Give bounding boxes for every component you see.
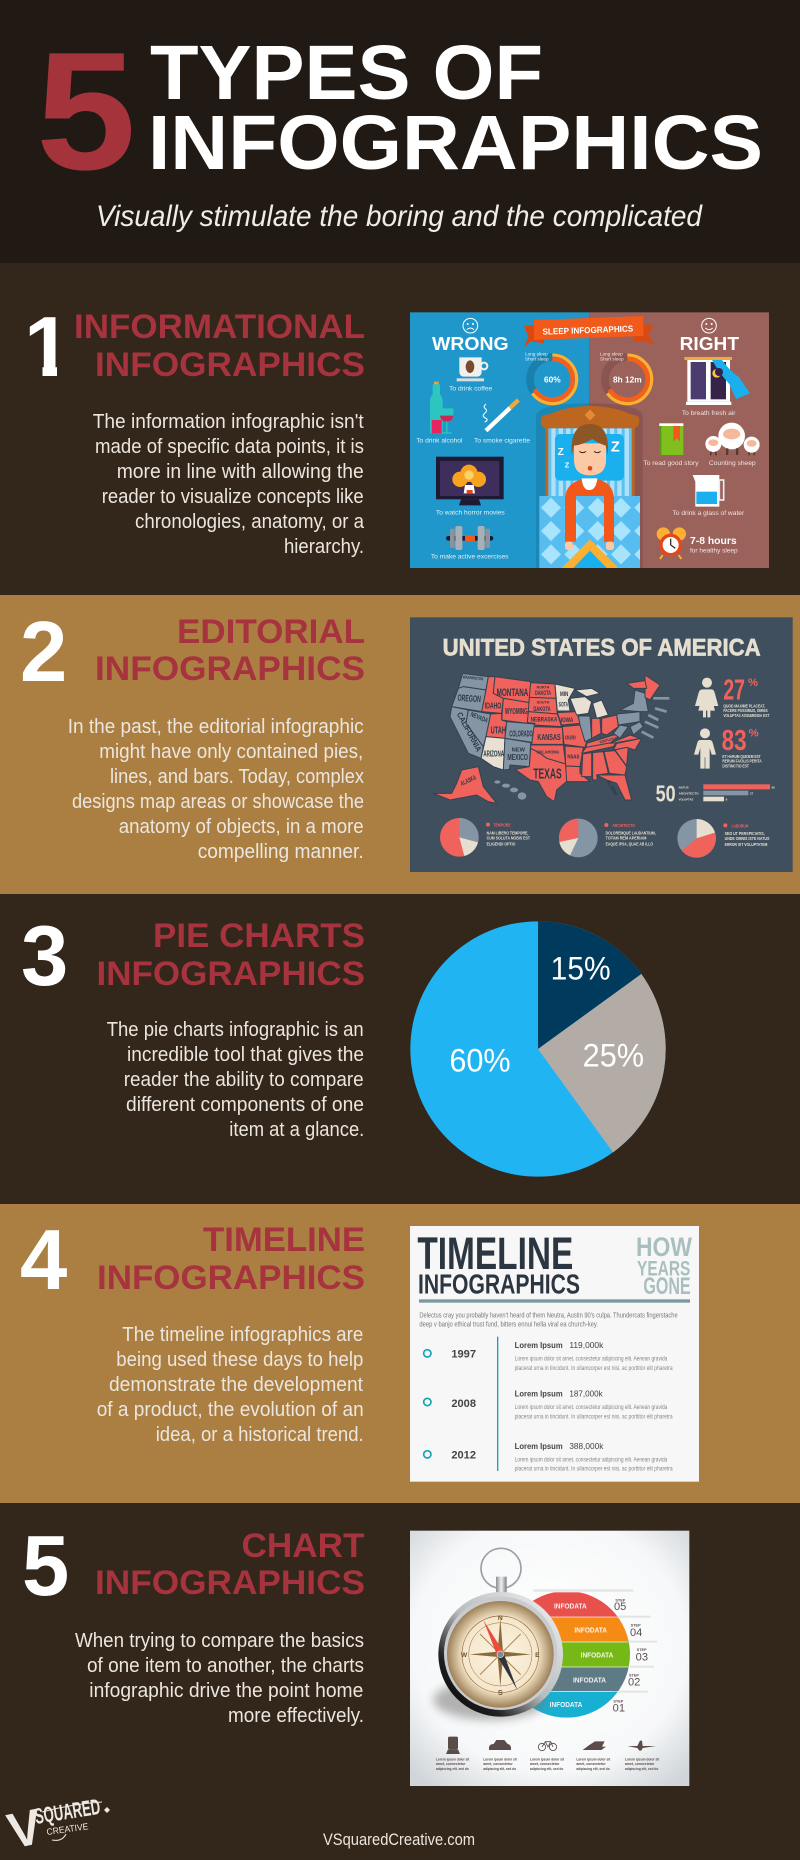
bed halo xyxy=(536,403,589,568)
sleeping man in bed: Z xyxy=(565,460,570,469)
donut 8h 12m: 8h 12m xyxy=(613,374,642,384)
heading xyxy=(95,613,365,688)
body text: reader to visualize concepts like xyxy=(102,486,364,508)
panel: editorial xyxy=(20,605,793,872)
right heading: RIGHT xyxy=(680,333,740,354)
stat: 83 percent xyxy=(694,725,762,769)
logo: CREATIVE xyxy=(46,1821,89,1837)
alarm clock: 7-8 hours xyxy=(690,536,737,547)
body text: designs map areas or showcase the xyxy=(72,791,364,813)
pie: laborum: UNDE OMNIS ISTE NATUS xyxy=(725,836,769,841)
state labels: UTAH xyxy=(491,725,506,736)
wine bottle and glass: To drink alcohol xyxy=(416,438,463,445)
body text: compelling manner. xyxy=(198,841,364,863)
intro text: deep v banjo ethical trust fund, bitters ennui hella viral ea church-key. xyxy=(419,1320,598,1329)
title: INFOGRAPHICS xyxy=(148,100,763,186)
band labels: INFODATA xyxy=(581,1653,613,1660)
body text xyxy=(93,411,365,558)
body text xyxy=(97,1324,364,1446)
US map infographic xyxy=(410,617,793,872)
entry 2008 xyxy=(424,1389,673,1421)
heading xyxy=(74,308,365,384)
stat: 83 percent: 83 xyxy=(722,725,747,757)
donut 8h 12m: Long sleep xyxy=(600,351,623,356)
tv: To watch horror movies xyxy=(436,510,505,517)
body text: When trying to compare the basics xyxy=(75,1630,364,1652)
book: To read good story xyxy=(643,460,699,467)
pie: tempore: CUM SOLUTA NOBIS EST xyxy=(487,836,530,841)
wrong heading: WRONG xyxy=(432,333,509,354)
website url: VSquaredCreative.com xyxy=(323,1830,475,1849)
how years gone: HOW xyxy=(636,1232,693,1262)
pie: architecto: ARCHITECTO xyxy=(612,823,635,828)
entry 1997: Lorem Ipsum xyxy=(515,1340,563,1350)
heading: TIMELINE xyxy=(203,1221,365,1259)
donut 60% xyxy=(525,351,577,404)
number 2: 2 xyxy=(20,605,67,700)
body text: of one item to another, the charts xyxy=(87,1655,364,1677)
body text: different components of one xyxy=(126,1094,364,1116)
stat: 50 bars: 8 xyxy=(726,797,728,801)
sleeping man in bed: Z xyxy=(611,440,620,456)
entry 2012 xyxy=(424,1441,673,1473)
pie chart: 60% xyxy=(449,1043,511,1079)
entry 2012: placerat urna in tincidunt. In ullamcorper est nisi, ac porttitor elit pharetra xyxy=(515,1466,673,1473)
donut 60%: 60% xyxy=(544,374,561,384)
state labels: NORTH xyxy=(537,684,549,689)
entry 2012: Lorem Ipsum xyxy=(515,1441,563,1451)
state labels: NEBRASKA xyxy=(531,717,557,724)
icon: train xyxy=(436,1737,470,1771)
entry 2012: 388,000k xyxy=(569,1441,604,1451)
pie: tempore: NAM LIBERO TEMPORE, xyxy=(487,831,528,836)
entry 2008: Lorem Ipsum xyxy=(515,1389,563,1399)
body text: being used these days to help xyxy=(116,1349,363,1371)
entry 2008: 187,000k xyxy=(569,1389,603,1399)
step labels: STEP xyxy=(631,1622,641,1627)
dumbbell: To make active excercises xyxy=(431,554,509,561)
icon: train: amet, consectetur xyxy=(436,1762,466,1766)
body text: The pie charts infographic is an xyxy=(107,1019,364,1041)
how years gone: YEARS xyxy=(637,1256,690,1280)
stat: 27 percent xyxy=(695,674,769,718)
state labels: MONTANA xyxy=(497,687,529,699)
icon: car: adipiscing elit, sed do xyxy=(483,1767,517,1771)
icon: car: Lorem ipsum dolor sit xyxy=(483,1758,517,1762)
stat: 27 percent: FACERE POSSIMUS, OMNIS xyxy=(723,708,768,713)
compass: N xyxy=(498,1615,503,1622)
ribbon: SLEEP INFOGRAPHICS xyxy=(542,323,634,337)
subtitle: Visually stimulate the boring and the complicated xyxy=(96,200,703,233)
title: TYPES OF xyxy=(150,30,543,116)
step labels xyxy=(613,1597,648,1715)
coffee cup xyxy=(449,357,493,393)
body text xyxy=(68,716,364,863)
entry 2012: Lorem ipsum dolor sit amet, consectetur adipiscing elit. Aenean gravida xyxy=(515,1456,668,1463)
transport icons xyxy=(436,1737,660,1771)
pie chart xyxy=(410,921,666,1177)
stat: 27 percent: 27 xyxy=(723,674,745,706)
entry 1997: placerat urna in tincidunt. In ullamcorper est nisi, ac porttitor elit pharetra xyxy=(515,1365,673,1372)
sleep infographic illustration xyxy=(410,312,769,568)
heading: PIE CHARTS xyxy=(153,917,365,955)
united states map xyxy=(433,673,669,803)
icon: ship xyxy=(576,1741,611,1771)
timeline infographic xyxy=(410,1226,699,1482)
pie chart: 25% xyxy=(583,1038,644,1074)
state labels: DAKOTA xyxy=(533,706,551,713)
icon: car: amet, consectetur xyxy=(483,1762,513,1766)
stat: 27 percent: QUOD MAXIME PLACEAT, xyxy=(723,703,765,708)
body text: infographic drive the point home xyxy=(89,1680,363,1702)
compass chart infographic xyxy=(410,1531,689,1786)
step labels: STEP xyxy=(637,1647,647,1652)
window xyxy=(682,357,750,417)
state labels: MIN xyxy=(560,692,568,698)
state labels: MEXICO xyxy=(507,753,528,762)
entry 1997: 119,000k xyxy=(569,1340,604,1350)
band labels xyxy=(550,1603,613,1709)
pie: tempore: TEMPORE xyxy=(493,823,511,828)
heading xyxy=(95,1527,365,1602)
step labels: 03 xyxy=(636,1651,648,1663)
panel: informational xyxy=(20,300,769,568)
right heading xyxy=(680,318,740,354)
coffee cup: To drink coffee xyxy=(449,386,493,393)
body text: The information infographic isn't xyxy=(93,411,364,433)
entry 2012: 2012 xyxy=(451,1449,476,1461)
title: 5 xyxy=(36,17,136,205)
icon: train: adipiscing elit, sed do xyxy=(436,1767,469,1771)
icon: bicycle: amet, consectetur xyxy=(530,1762,560,1766)
stat: 50 bars: VOLUPTAS xyxy=(679,797,693,801)
logo: SQUARED xyxy=(33,1794,102,1829)
panel: pie charts xyxy=(21,909,666,1177)
step labels: STEP xyxy=(615,1597,626,1602)
number 3: 3 xyxy=(21,909,68,1004)
stat: 50 bars xyxy=(656,781,775,807)
body text: more effectively. xyxy=(228,1705,364,1727)
window: To breath fresh air xyxy=(682,410,736,417)
stat: 83 percent: DISTINCTIO EST xyxy=(722,763,749,768)
icon: ship: Lorem ipsum dolor sit xyxy=(576,1758,611,1762)
body text xyxy=(107,1019,364,1141)
how years gone: GONE xyxy=(643,1273,691,1300)
icon: plane: amet, consectetur xyxy=(625,1762,655,1766)
icon: ship: amet, consectetur xyxy=(576,1762,606,1766)
band labels: INFODATA xyxy=(550,1702,582,1709)
number 5: 5 xyxy=(22,1519,69,1614)
stat: 27 percent: VOLUPTAS ASSUMENDA EST xyxy=(723,713,769,718)
intro text: Delectus cray you probably haven't heard of them Neutra, Austin 90's culpa. Thundercats fingerstache xyxy=(419,1311,678,1320)
state labels: SOTA xyxy=(559,703,568,709)
state labels: SOUTH xyxy=(537,699,549,704)
pie: laborum: LABORUM xyxy=(732,823,748,828)
step labels: 04 xyxy=(630,1627,642,1639)
shelves xyxy=(533,1589,657,1693)
pie: laborum: ERROR SIT VOLUPTATEM xyxy=(725,842,767,847)
donut 8h 12m xyxy=(600,351,652,404)
body text: In the past, the editorial infographic xyxy=(68,716,364,738)
stat: 50 bars: ARCHITECTO xyxy=(679,791,699,795)
band labels: INFODATA xyxy=(573,1677,606,1684)
state labels: WASHINGTON xyxy=(463,674,484,681)
number 4: 4 xyxy=(20,1213,67,1308)
icon: ship: adipiscing elit, sed do xyxy=(576,1767,610,1771)
state labels: COLORADO xyxy=(509,729,533,739)
body text: hierarchy. xyxy=(284,536,364,558)
body text: anatomy of objects, in a more xyxy=(119,816,364,838)
heading: EDITORIAL xyxy=(177,613,365,651)
icon: plane: Lorem ipsum dolor sit xyxy=(625,1758,660,1762)
pie: tempore xyxy=(440,818,530,857)
icon: bicycle: Lorem ipsum dolor sit xyxy=(530,1758,565,1762)
pie: architecto xyxy=(559,819,656,857)
body text: idea, or a historical trend. xyxy=(156,1424,364,1446)
state labels: TEXAS xyxy=(533,766,562,782)
step labels: 02 xyxy=(628,1677,640,1689)
body text: reader the ability to compare xyxy=(124,1069,364,1091)
donut 60%: Short sleep xyxy=(525,357,549,362)
state labels: OREGON xyxy=(457,693,481,704)
map title: UNITED STATES OF AMERICA xyxy=(443,635,761,662)
state labels: OKLAHOMA xyxy=(537,749,560,754)
entry 1997 xyxy=(424,1340,673,1372)
body text: The timeline infographics are xyxy=(122,1324,363,1346)
state labels: NEVADA xyxy=(469,711,489,725)
icon: bicycle xyxy=(530,1742,565,1771)
entry 1997: Lorem ipsum dolor sit amet, consectetur adipiscing elit. Aenean gravida xyxy=(515,1355,668,1362)
body text: incredible tool that gives the xyxy=(127,1044,364,1066)
alarm clock: for healthy sleep xyxy=(690,547,738,554)
body text xyxy=(75,1630,364,1727)
timeline title: TIMELINE xyxy=(417,1228,573,1279)
body text: item at a glance. xyxy=(229,1119,364,1141)
step labels: STEP xyxy=(629,1672,639,1677)
panel: timeline xyxy=(20,1213,699,1482)
stat: 27 percent: % xyxy=(748,677,758,689)
stat: 83 percent: RERUM FACILIS PERITA xyxy=(722,759,762,764)
right side halo xyxy=(589,403,643,568)
heading: INFORMATIONAL xyxy=(74,308,365,346)
sheep: Counting sheep xyxy=(709,460,756,467)
step labels: 01 xyxy=(613,1703,625,1715)
body text: made of specific data points, it is xyxy=(95,436,364,458)
timeline title xyxy=(417,1228,580,1299)
pie: laborum: SED UT PERSPICIATIS, xyxy=(725,831,765,836)
panel: chart xyxy=(22,1519,689,1786)
body text: chronologies, anatomy, or a xyxy=(135,511,365,533)
compass: E xyxy=(535,1652,540,1659)
ribbon xyxy=(524,316,654,347)
state labels: NEW xyxy=(512,748,526,754)
heading: INFOGRAPHICS xyxy=(97,1259,365,1297)
entry 1997: 1997 xyxy=(451,1349,476,1361)
compass: W xyxy=(461,1652,468,1659)
heading: INFOGRAPHICS xyxy=(96,955,365,993)
dumbbell xyxy=(431,526,509,561)
title xyxy=(36,17,763,205)
stat: 50 bars: 50 xyxy=(656,781,676,807)
body text: demonstrate the development xyxy=(109,1374,363,1396)
logo: V xyxy=(3,1798,48,1860)
stat: 50 bars: NATUS xyxy=(679,785,689,789)
heading: CHART xyxy=(242,1527,365,1565)
step labels: 05 xyxy=(614,1601,626,1613)
jug of water: To drink a glass of water xyxy=(672,510,745,517)
icon: plane: adipiscing elit, sed do xyxy=(625,1767,659,1771)
cigarette xyxy=(474,400,530,445)
alarm clock xyxy=(657,527,738,559)
wrong heading xyxy=(432,318,509,354)
stat: 50 bars: 36 xyxy=(771,785,775,789)
icon: car xyxy=(483,1740,517,1771)
heading xyxy=(96,917,365,993)
pie: architecto: EAQUE IPSA, QUAE AB ILLO xyxy=(606,841,653,846)
how years gone xyxy=(636,1232,693,1300)
state labels: ALASKA xyxy=(460,774,478,788)
state labels: WYOMING xyxy=(505,707,528,716)
stat: 83 percent: ET HARUM QUIDEM EST xyxy=(722,754,761,759)
entry 2008: 2008 xyxy=(451,1398,476,1410)
body text: might have only contained pies, xyxy=(99,741,363,763)
sleeping man in bed xyxy=(539,406,640,568)
state labels: CALIFORNIA xyxy=(455,711,483,753)
heading xyxy=(97,1221,365,1297)
heading: INFOGRAPHICS xyxy=(95,1564,365,1602)
icon: train: Lorem ipsum dolor sit xyxy=(436,1758,470,1762)
donut 8h 12m: Short sleep xyxy=(600,357,624,362)
donut 60%: Long sleep xyxy=(525,351,548,356)
sleeping man in bed: Z xyxy=(558,447,564,458)
state labels: IOWA xyxy=(561,717,573,724)
icon: bicycle: adipiscing elit, sed do xyxy=(530,1767,564,1771)
state labels: IDAHO xyxy=(485,701,501,710)
stat: 50 bars: 27 xyxy=(750,791,754,795)
pie: tempore: ELIGENDI OPTIO xyxy=(487,841,516,846)
stat: 83 percent: % xyxy=(749,728,759,740)
band labels: INFODATA xyxy=(574,1628,607,1635)
entry 2008: Lorem ipsum dolor sit amet, consectetur adipiscing elit. Aenean gravida xyxy=(515,1404,668,1411)
body text: lines, and bars. Today, complex xyxy=(110,766,364,788)
cigarette: To smoke cigarette xyxy=(474,438,530,445)
pie: architecto: DOLOREMQUE LAUDANTIUM, xyxy=(606,831,656,836)
state labels: DAKOTA xyxy=(535,690,551,697)
tv xyxy=(436,457,505,517)
state labels: KENTUCKY xyxy=(599,736,617,744)
heading: INFOGRAPHICS xyxy=(95,346,365,384)
state labels: OURI xyxy=(565,735,576,741)
state labels xyxy=(455,674,619,797)
number 1: 1 xyxy=(24,300,71,395)
intro text xyxy=(419,1311,678,1329)
timeline title: INFOGRAPHICS xyxy=(418,1268,580,1299)
body text: more in line with allowing the xyxy=(117,461,364,483)
jug of water xyxy=(672,475,745,517)
state labels: NSAS xyxy=(567,754,580,760)
book xyxy=(643,423,699,467)
state labels: KANSAS xyxy=(537,732,561,742)
body text: of a product, the evolution of an xyxy=(97,1399,364,1421)
pie: laborum xyxy=(677,819,769,858)
heading: INFOGRAPHICS xyxy=(95,650,365,688)
pie chart: 15% xyxy=(551,950,611,986)
compass xyxy=(433,1548,563,1720)
band labels: INFODATA xyxy=(554,1603,587,1610)
info bands xyxy=(532,1592,630,1718)
logo xyxy=(3,1794,110,1860)
state labels: FLORIDA xyxy=(605,780,619,797)
icon: plane xyxy=(625,1741,660,1771)
wine bottle and glass xyxy=(416,382,463,445)
pie: architecto: TOTAM REM APERIAM xyxy=(606,836,646,841)
compass: S xyxy=(498,1688,503,1697)
entry 2008: placerat urna in tincidunt. In ullamcorper est nisi, ac porttitor elit pharetra xyxy=(515,1414,673,1421)
state labels: ARIZONA xyxy=(483,750,504,759)
step labels: STEP xyxy=(613,1699,624,1704)
sheep xyxy=(705,423,760,467)
